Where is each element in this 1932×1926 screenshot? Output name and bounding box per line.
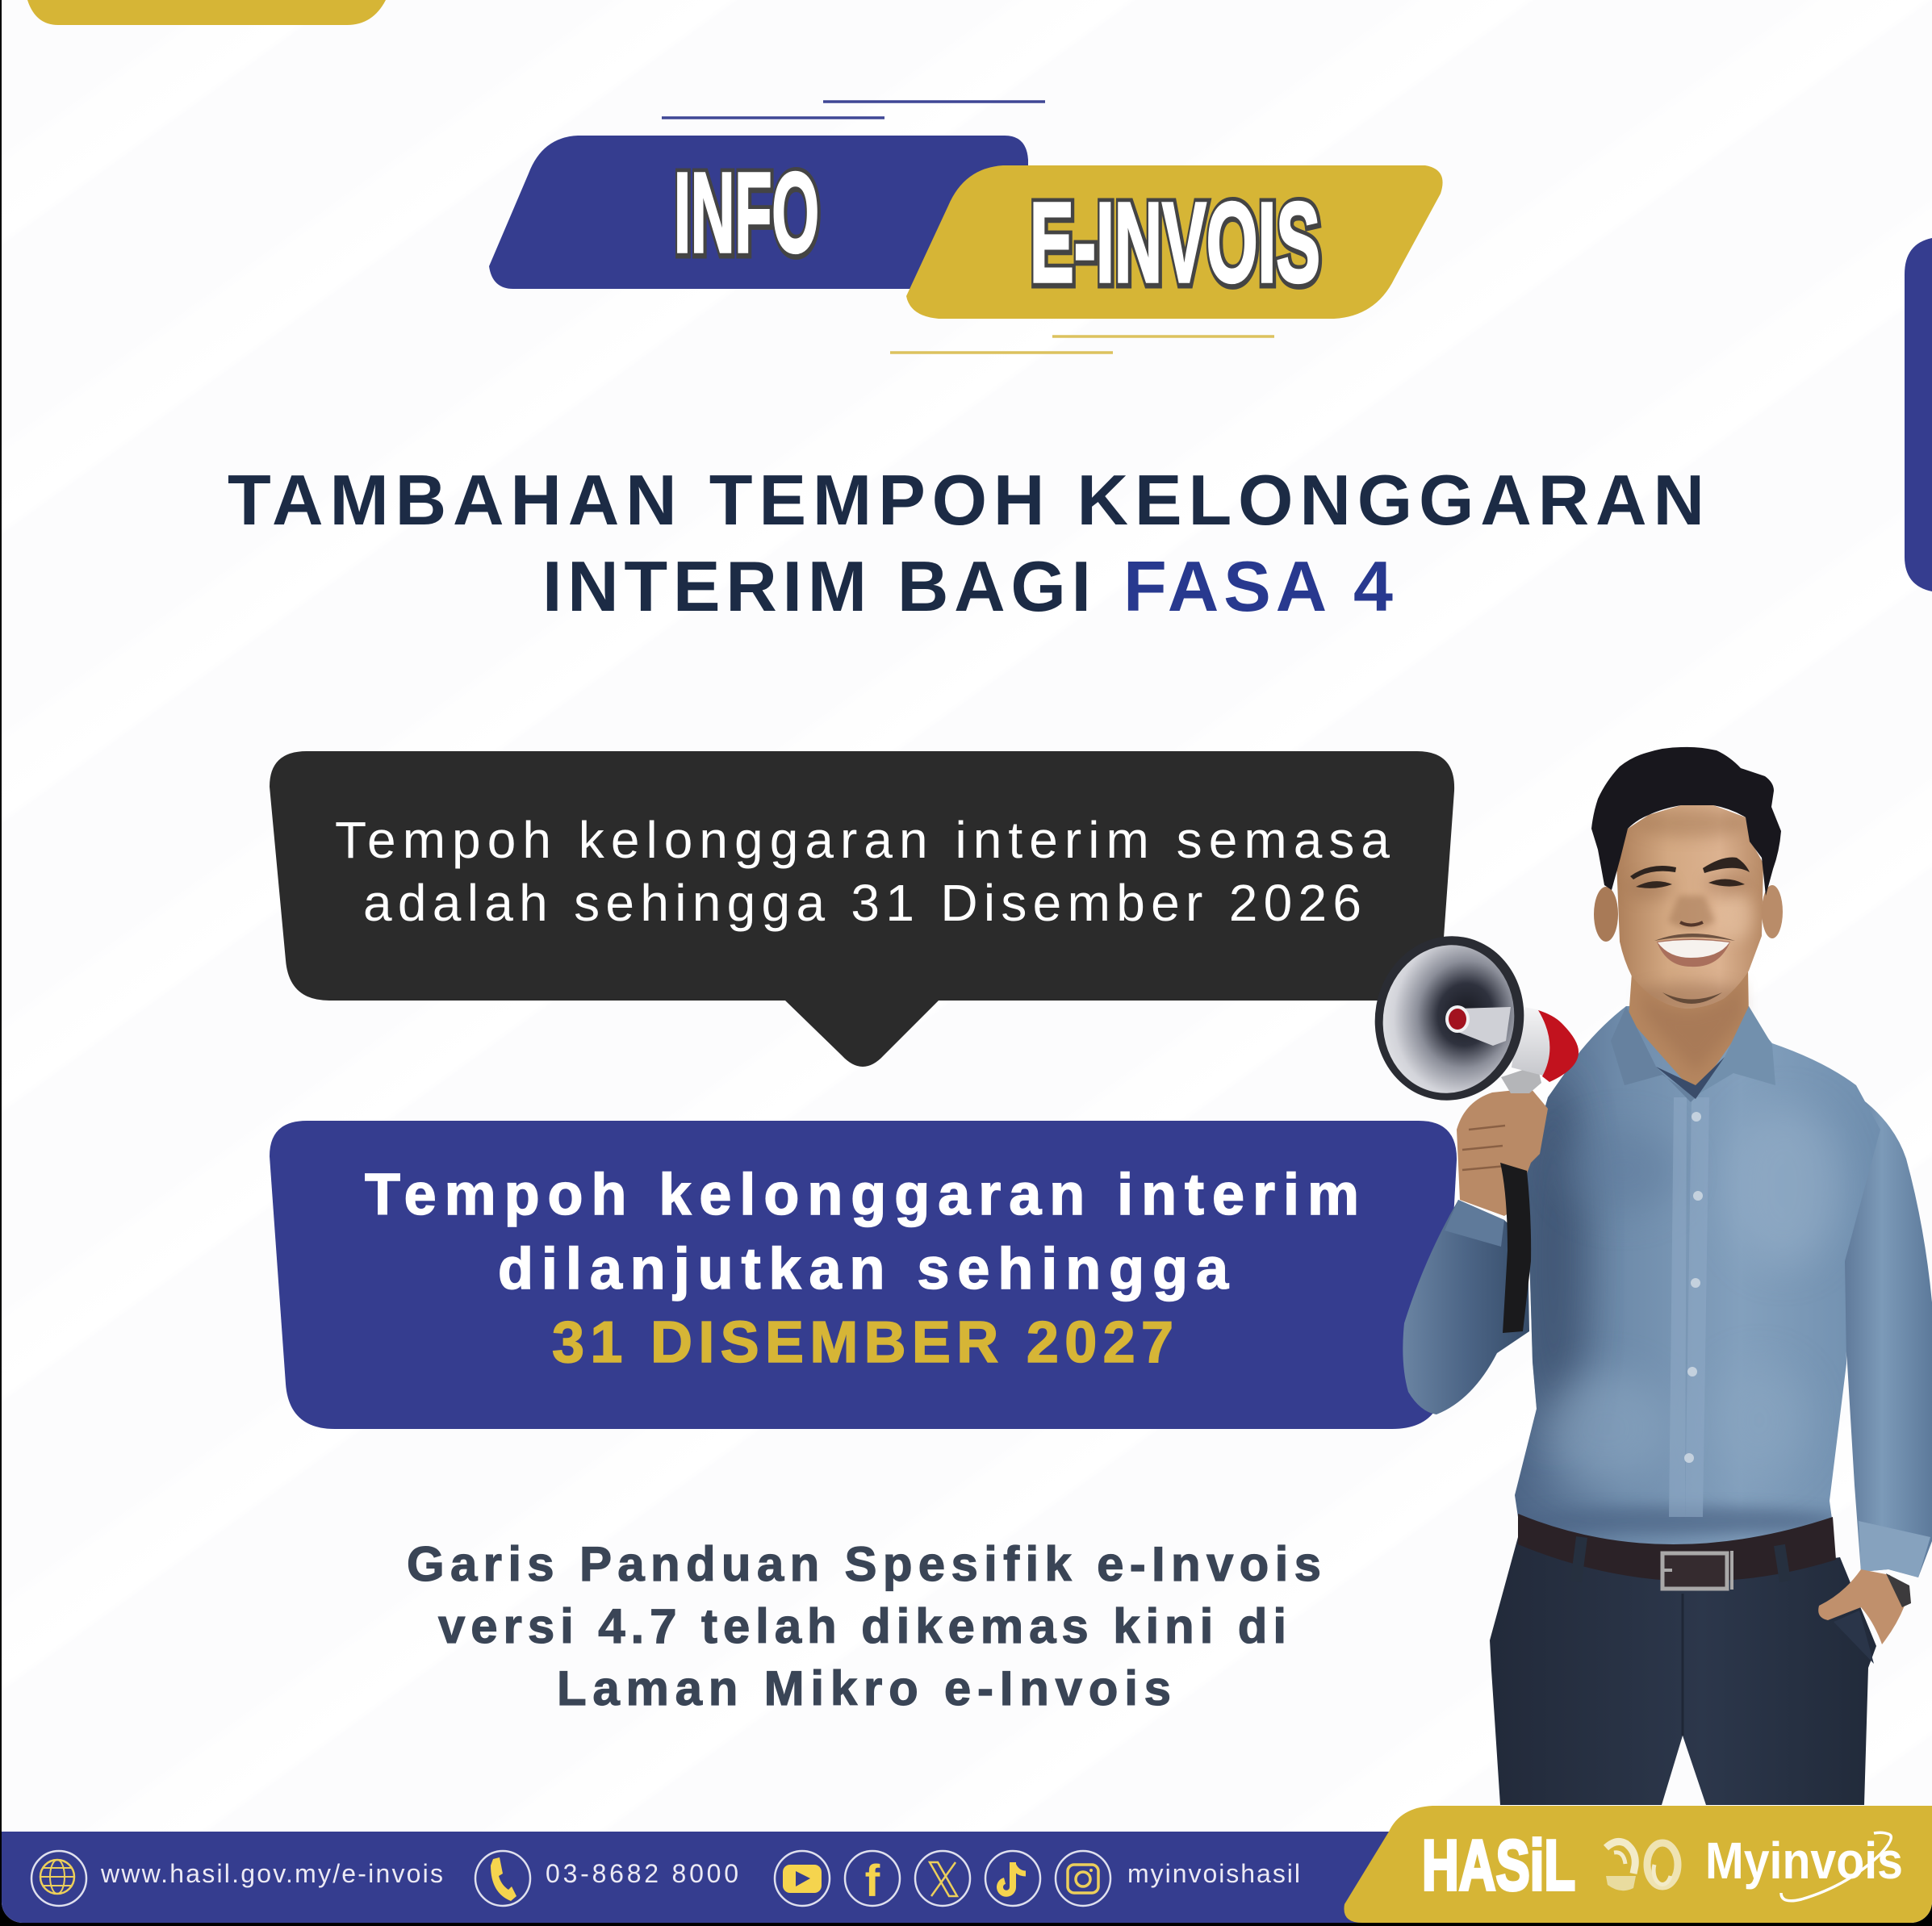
guideline note	[407, 1537, 1321, 1715]
phone icon	[475, 1851, 530, 1906]
belt buckle	[1662, 1551, 1732, 1590]
left sleeve	[1403, 1200, 1529, 1414]
header badge: INFO E-INVOIS	[489, 102, 1443, 353]
gold E-INVOIS plate	[906, 165, 1443, 319]
HASiL logo: HASiL	[1422, 1825, 1575, 1905]
eyes	[1636, 879, 1745, 888]
megaphone horn	[1371, 934, 1526, 1104]
mouth	[1657, 939, 1730, 967]
blue box: extended period	[270, 1121, 1457, 1429]
trousers	[1490, 1537, 1876, 1805]
face	[1616, 805, 1763, 1018]
E-INVOIS label: E-INVOIS	[1031, 179, 1321, 307]
belt	[1518, 1514, 1836, 1581]
main title: INTERIM BAGI	[542, 546, 1091, 626]
MyInvois logo: Myinvois	[1705, 1832, 1903, 1890]
guideline note: Laman Mikro e-Invois	[557, 1661, 1171, 1715]
shirt shading	[1505, 1073, 1844, 1535]
shirt collar	[1611, 1006, 1775, 1102]
E-INVOIS label	[1030, 178, 1321, 307]
main title: FASA 4	[1123, 546, 1393, 626]
trouser fly	[1682, 1594, 1683, 1736]
dark speech bubble: current period	[270, 751, 1454, 1067]
INFO label: INFO	[674, 148, 819, 276]
YouTube icon	[775, 1851, 830, 1906]
megaphone	[1362, 925, 1579, 1112]
megaphone driver	[1456, 1007, 1511, 1046]
neck	[1629, 968, 1749, 1094]
phone number: 03-8682 8000	[546, 1859, 738, 1888]
megaphone barrel	[1512, 1006, 1558, 1076]
megaphone rim	[1362, 925, 1537, 1112]
gold logo plate	[1344, 1806, 1932, 1923]
nose	[1668, 896, 1715, 929]
main title: TAMBAHAN TEMPOH KELONGGARAN	[228, 460, 1704, 540]
ears	[1594, 885, 1783, 942]
neck shadow	[1638, 980, 1743, 1073]
dark speech bubble: current period: Tempoh kelonggaran interim semasa	[335, 811, 1390, 869]
30th anniversary logo	[1606, 1841, 1678, 1890]
footer bar	[0, 1832, 1420, 1926]
Facebook icon: f	[865, 1855, 880, 1906]
goatee	[1662, 992, 1722, 1004]
blue box: extended period: dilanjutkan sehingga	[498, 1237, 1229, 1301]
shirt torso	[1515, 1006, 1880, 1569]
guideline note: versi 4.7 telah dikemas kini di	[438, 1599, 1286, 1653]
E-INVOIS label: E-INVOIS	[1030, 178, 1320, 306]
globe icon	[31, 1851, 86, 1906]
shirt buttons	[1684, 1112, 1703, 1463]
decorative right-edge blue tab	[1905, 238, 1932, 591]
X icon	[915, 1851, 970, 1906]
INFO label	[674, 148, 820, 277]
moustache	[1654, 934, 1735, 941]
hand holding megaphone	[1457, 1088, 1548, 1216]
website: www.hasil.gov.my/e-invois	[100, 1859, 443, 1888]
pocket hand with watch	[1818, 1569, 1911, 1664]
man holding megaphone	[1362, 747, 1932, 1805]
blue box: extended period: Tempoh kelonggaran interim	[365, 1163, 1359, 1227]
right sleeve and cuff	[1832, 1089, 1932, 1577]
cable	[1500, 1163, 1531, 1333]
megaphone red cap	[1538, 1010, 1579, 1082]
Instagram icon	[1056, 1851, 1110, 1906]
guideline note: Garis Panduan Spesifik e-Invois	[407, 1537, 1321, 1591]
eyebrows	[1630, 858, 1750, 879]
INFO label: INFO	[675, 149, 820, 277]
TikTok icon	[985, 1851, 1040, 1906]
main title	[228, 460, 1704, 626]
megaphone red dot	[1445, 1005, 1470, 1033]
social handle: myinvoishasil	[1127, 1859, 1300, 1888]
decorative top-left gold tab	[27, 0, 386, 25]
Facebook icon	[845, 1851, 900, 1906]
dark speech bubble: current period: adalah sehingga 31 Disember 2026	[363, 874, 1361, 932]
blue box: extended period: 31 DISEMBER 2027	[552, 1310, 1173, 1375]
blue INFO plate	[489, 136, 1028, 289]
hair	[1591, 747, 1781, 896]
megaphone bracket	[1501, 1065, 1541, 1093]
